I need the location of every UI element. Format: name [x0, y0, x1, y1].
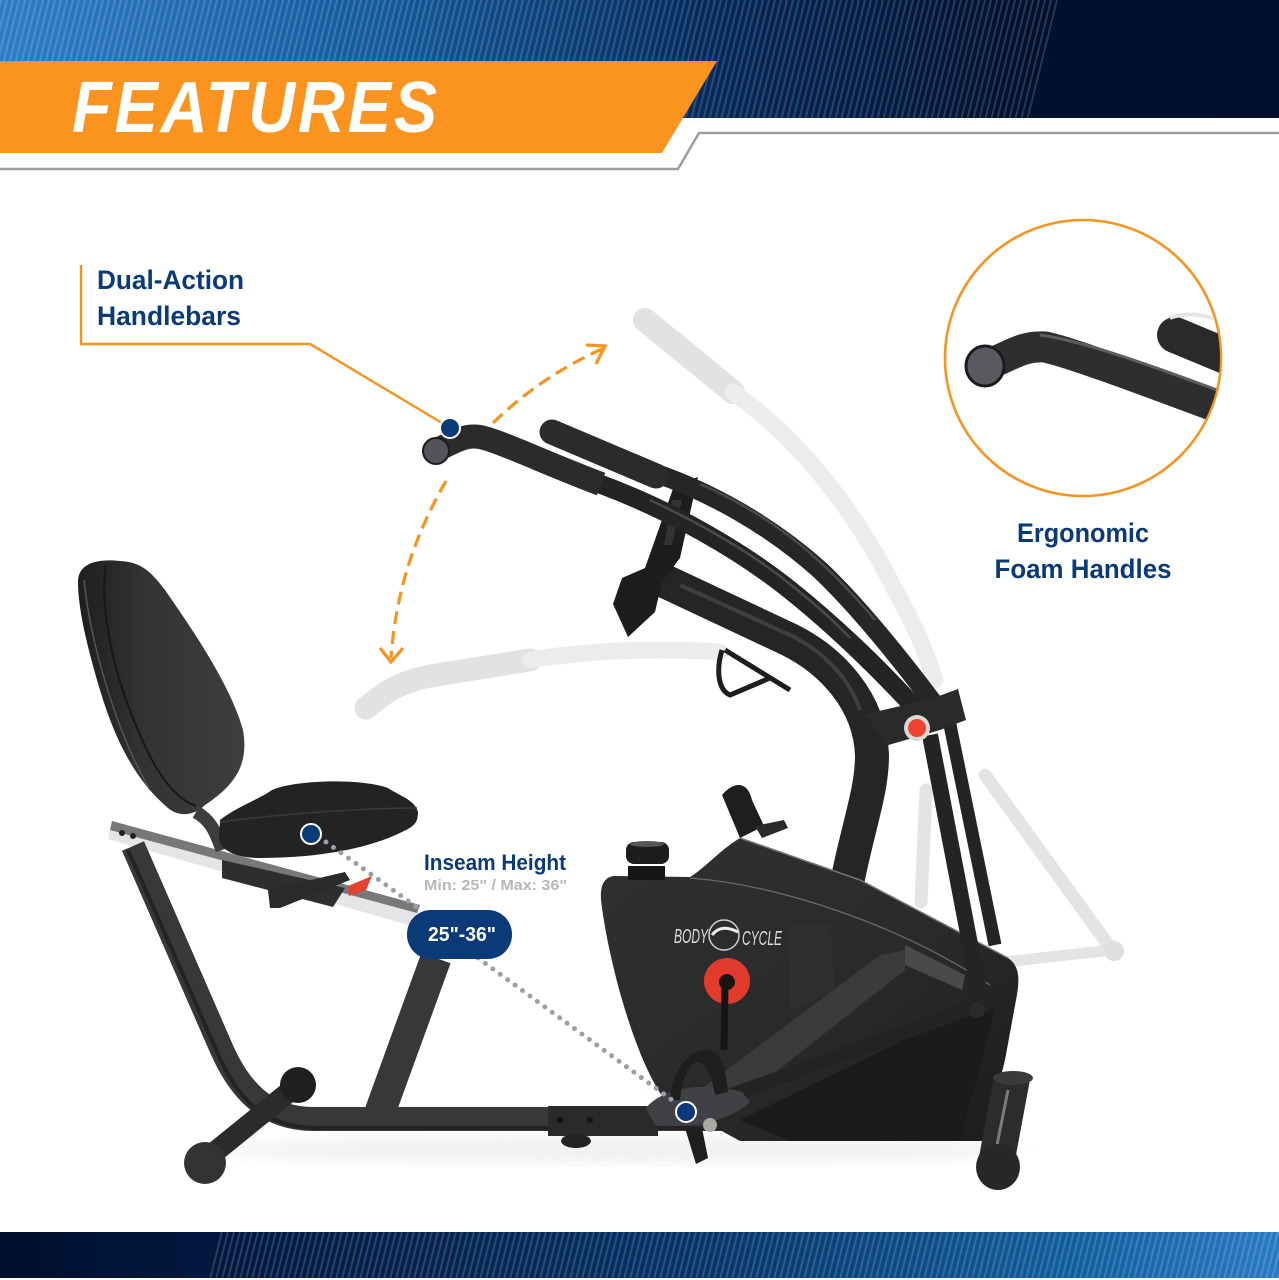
inseam pill [407, 910, 512, 959]
hotspot: seat [301, 824, 321, 844]
motion arrow down [380, 481, 446, 662]
rear stabilizer [184, 1067, 316, 1184]
front stabilizer [976, 1071, 1033, 1190]
ergonomic label: Ergonomic [1017, 518, 1149, 548]
brand logo: CYCLE [742, 928, 782, 950]
front linkage leg [930, 735, 983, 1012]
dotted inseam line [326, 842, 672, 1100]
rear linkage leg [950, 725, 995, 945]
water bottle strap [722, 785, 788, 838]
title banner: features: FEATURES [72, 67, 440, 148]
detail lens: foam handles [945, 220, 1240, 496]
ghost handlebars and linkage [366, 320, 1124, 962]
seat cushion [219, 781, 418, 858]
motion arrow up [493, 345, 605, 423]
seat back [78, 560, 244, 814]
seat rail [108, 821, 420, 926]
rail clamp [548, 1106, 658, 1148]
ghost pedal arm on housing [700, 925, 965, 1100]
dual-action label: Handlebars [97, 301, 241, 331]
brand logo [674, 920, 782, 950]
flywheel housing [601, 838, 1018, 1141]
active handlebars [423, 432, 935, 708]
seat slider bracket [222, 860, 372, 908]
floor shadow [220, 1136, 1020, 1164]
console bracket [613, 477, 698, 637]
brand logo: BODY [674, 926, 709, 948]
dual-action label: Dual-Action [97, 265, 244, 295]
pedal [646, 1050, 750, 1164]
inseam label: Min: 25" / Max: 36" [424, 878, 567, 894]
main upright stem [658, 578, 872, 878]
inseam label [424, 850, 567, 894]
hotspot: handlebar [440, 418, 460, 438]
dual-action leader line [81, 265, 442, 423]
pivot housing [865, 689, 966, 746]
rear frame [128, 846, 770, 1128]
hotspot: pedal [676, 1102, 696, 1122]
dual-action label [97, 265, 244, 331]
footer band [0, 1232, 1279, 1280]
inseam pill: 25"-36" [428, 924, 496, 946]
header band [0, 0, 1279, 118]
seat post [196, 812, 222, 850]
tension knob [626, 841, 669, 880]
ergonomic label: Foam Handles [994, 554, 1172, 584]
inseam label: Inseam Height [424, 850, 567, 875]
bottle cage [719, 650, 790, 695]
red crank hub [704, 958, 750, 1050]
pedal arm [690, 1002, 985, 1110]
title banner: features [0, 61, 717, 153]
ergonomic label [994, 518, 1172, 584]
